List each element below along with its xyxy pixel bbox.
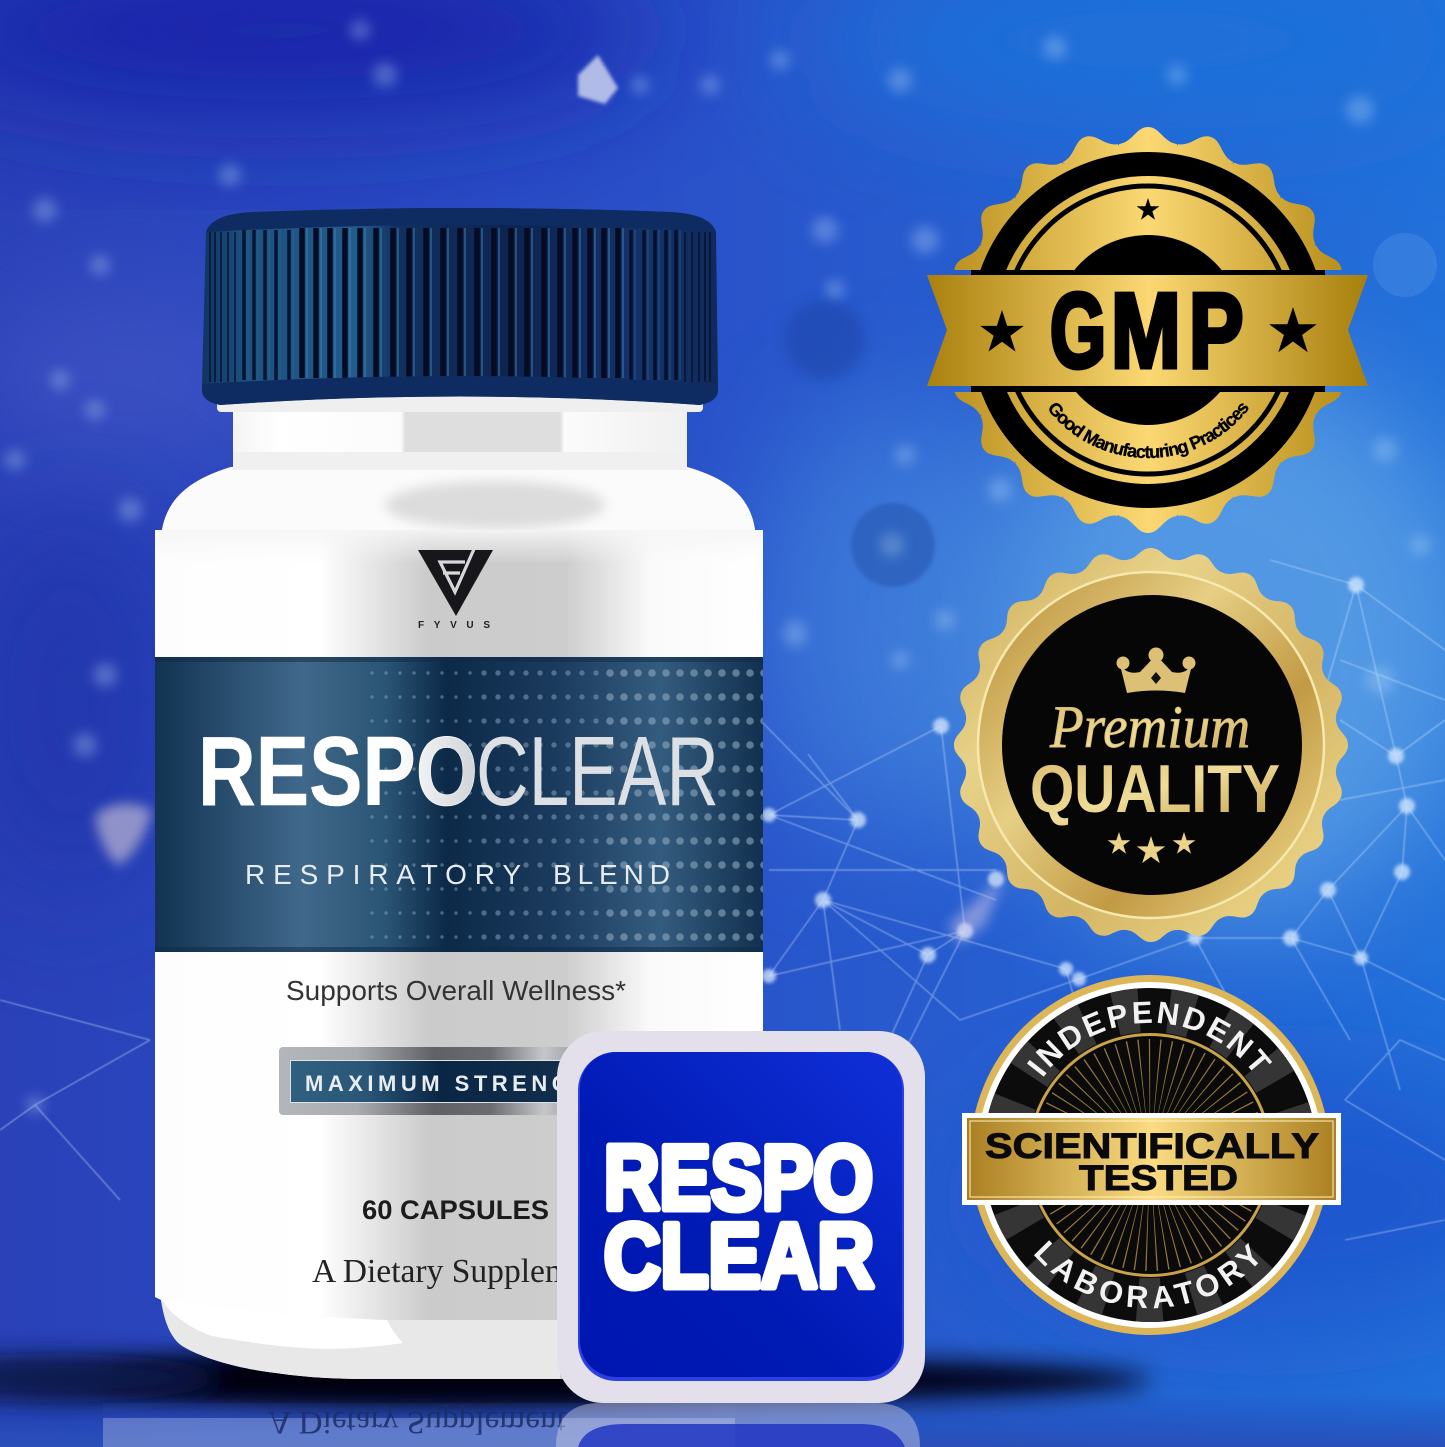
box wordmark: RESPO xyxy=(604,1128,873,1229)
label band xyxy=(155,657,763,952)
bottle cap xyxy=(202,208,718,405)
Premium Quality badge xyxy=(951,545,1351,945)
banner text xyxy=(985,1127,1319,1198)
floor reflection xyxy=(103,1403,920,1447)
Independent Laboratory badge xyxy=(962,975,1341,1335)
supplement note: A Dietary Supplement xyxy=(312,1253,613,1290)
product descriptor xyxy=(245,859,670,890)
GMP title xyxy=(1050,272,1243,391)
banner text: SCIENTIFICALLY xyxy=(985,1127,1319,1166)
scalloped gold seal xyxy=(954,127,1342,533)
bottom arc text: LABORATORY xyxy=(1034,1240,1258,1308)
ribbon stars xyxy=(980,307,1317,352)
crown icon xyxy=(1116,648,1196,693)
blue RespoClear box xyxy=(557,1031,925,1403)
GMP title: G xyxy=(1050,272,1106,390)
dot texture xyxy=(365,667,763,947)
product name xyxy=(198,716,719,826)
product bottle xyxy=(155,208,763,1379)
top arc text: INDEPENDENT xyxy=(1027,1002,1272,1077)
segmented ring xyxy=(1005,1010,1295,1300)
brand logo xyxy=(418,549,493,631)
pale blurred shards xyxy=(95,55,1005,945)
gold ribbon xyxy=(927,275,1368,386)
reflected blue box xyxy=(556,1403,920,1447)
top star xyxy=(1137,198,1159,220)
blurred bokeh xyxy=(5,20,1430,1114)
sunburst rays xyxy=(1075,1080,1225,1230)
product name: CLEAR xyxy=(476,716,719,826)
GMP title: M xyxy=(1111,273,1181,390)
product descriptor: RESPIRATORY xyxy=(245,859,521,890)
script heading: Premium xyxy=(1049,694,1250,760)
glowing nodes xyxy=(762,577,1415,986)
gold banner xyxy=(962,1113,1341,1205)
reflected label text: A Dietary Supplement xyxy=(268,1404,566,1440)
maximum strength pill: MAXIMUM STRENGTH xyxy=(305,1071,612,1096)
banner text: TESTED xyxy=(1079,1159,1238,1198)
bottle neck xyxy=(217,392,703,470)
bokeh discs xyxy=(785,233,1437,587)
capsule count: 60 CAPSULES xyxy=(362,1195,549,1225)
GMP title: P xyxy=(1189,272,1243,391)
maximum strength pill xyxy=(279,1047,612,1115)
seal arc text: Good Manufacturing Practices xyxy=(1049,403,1248,458)
floor shadow band xyxy=(0,1354,1445,1447)
product name: RESPO xyxy=(198,716,478,826)
tagline: Supports Overall Wellness* xyxy=(286,975,626,1006)
lower bottle highlight xyxy=(161,1298,560,1379)
GMP badge xyxy=(927,127,1368,533)
brand name: FYVUS xyxy=(418,620,490,631)
three stars xyxy=(1108,832,1195,863)
box wordmark xyxy=(604,1128,874,1307)
bottle body xyxy=(155,467,763,1379)
quality heading: QUALITY xyxy=(1030,751,1280,827)
product descriptor: BLEND xyxy=(553,859,670,890)
shoulder shading xyxy=(155,467,763,564)
scalloped gold rim xyxy=(951,545,1351,945)
box wordmark: CLEAR xyxy=(604,1206,874,1307)
network lines xyxy=(0,560,1445,1240)
